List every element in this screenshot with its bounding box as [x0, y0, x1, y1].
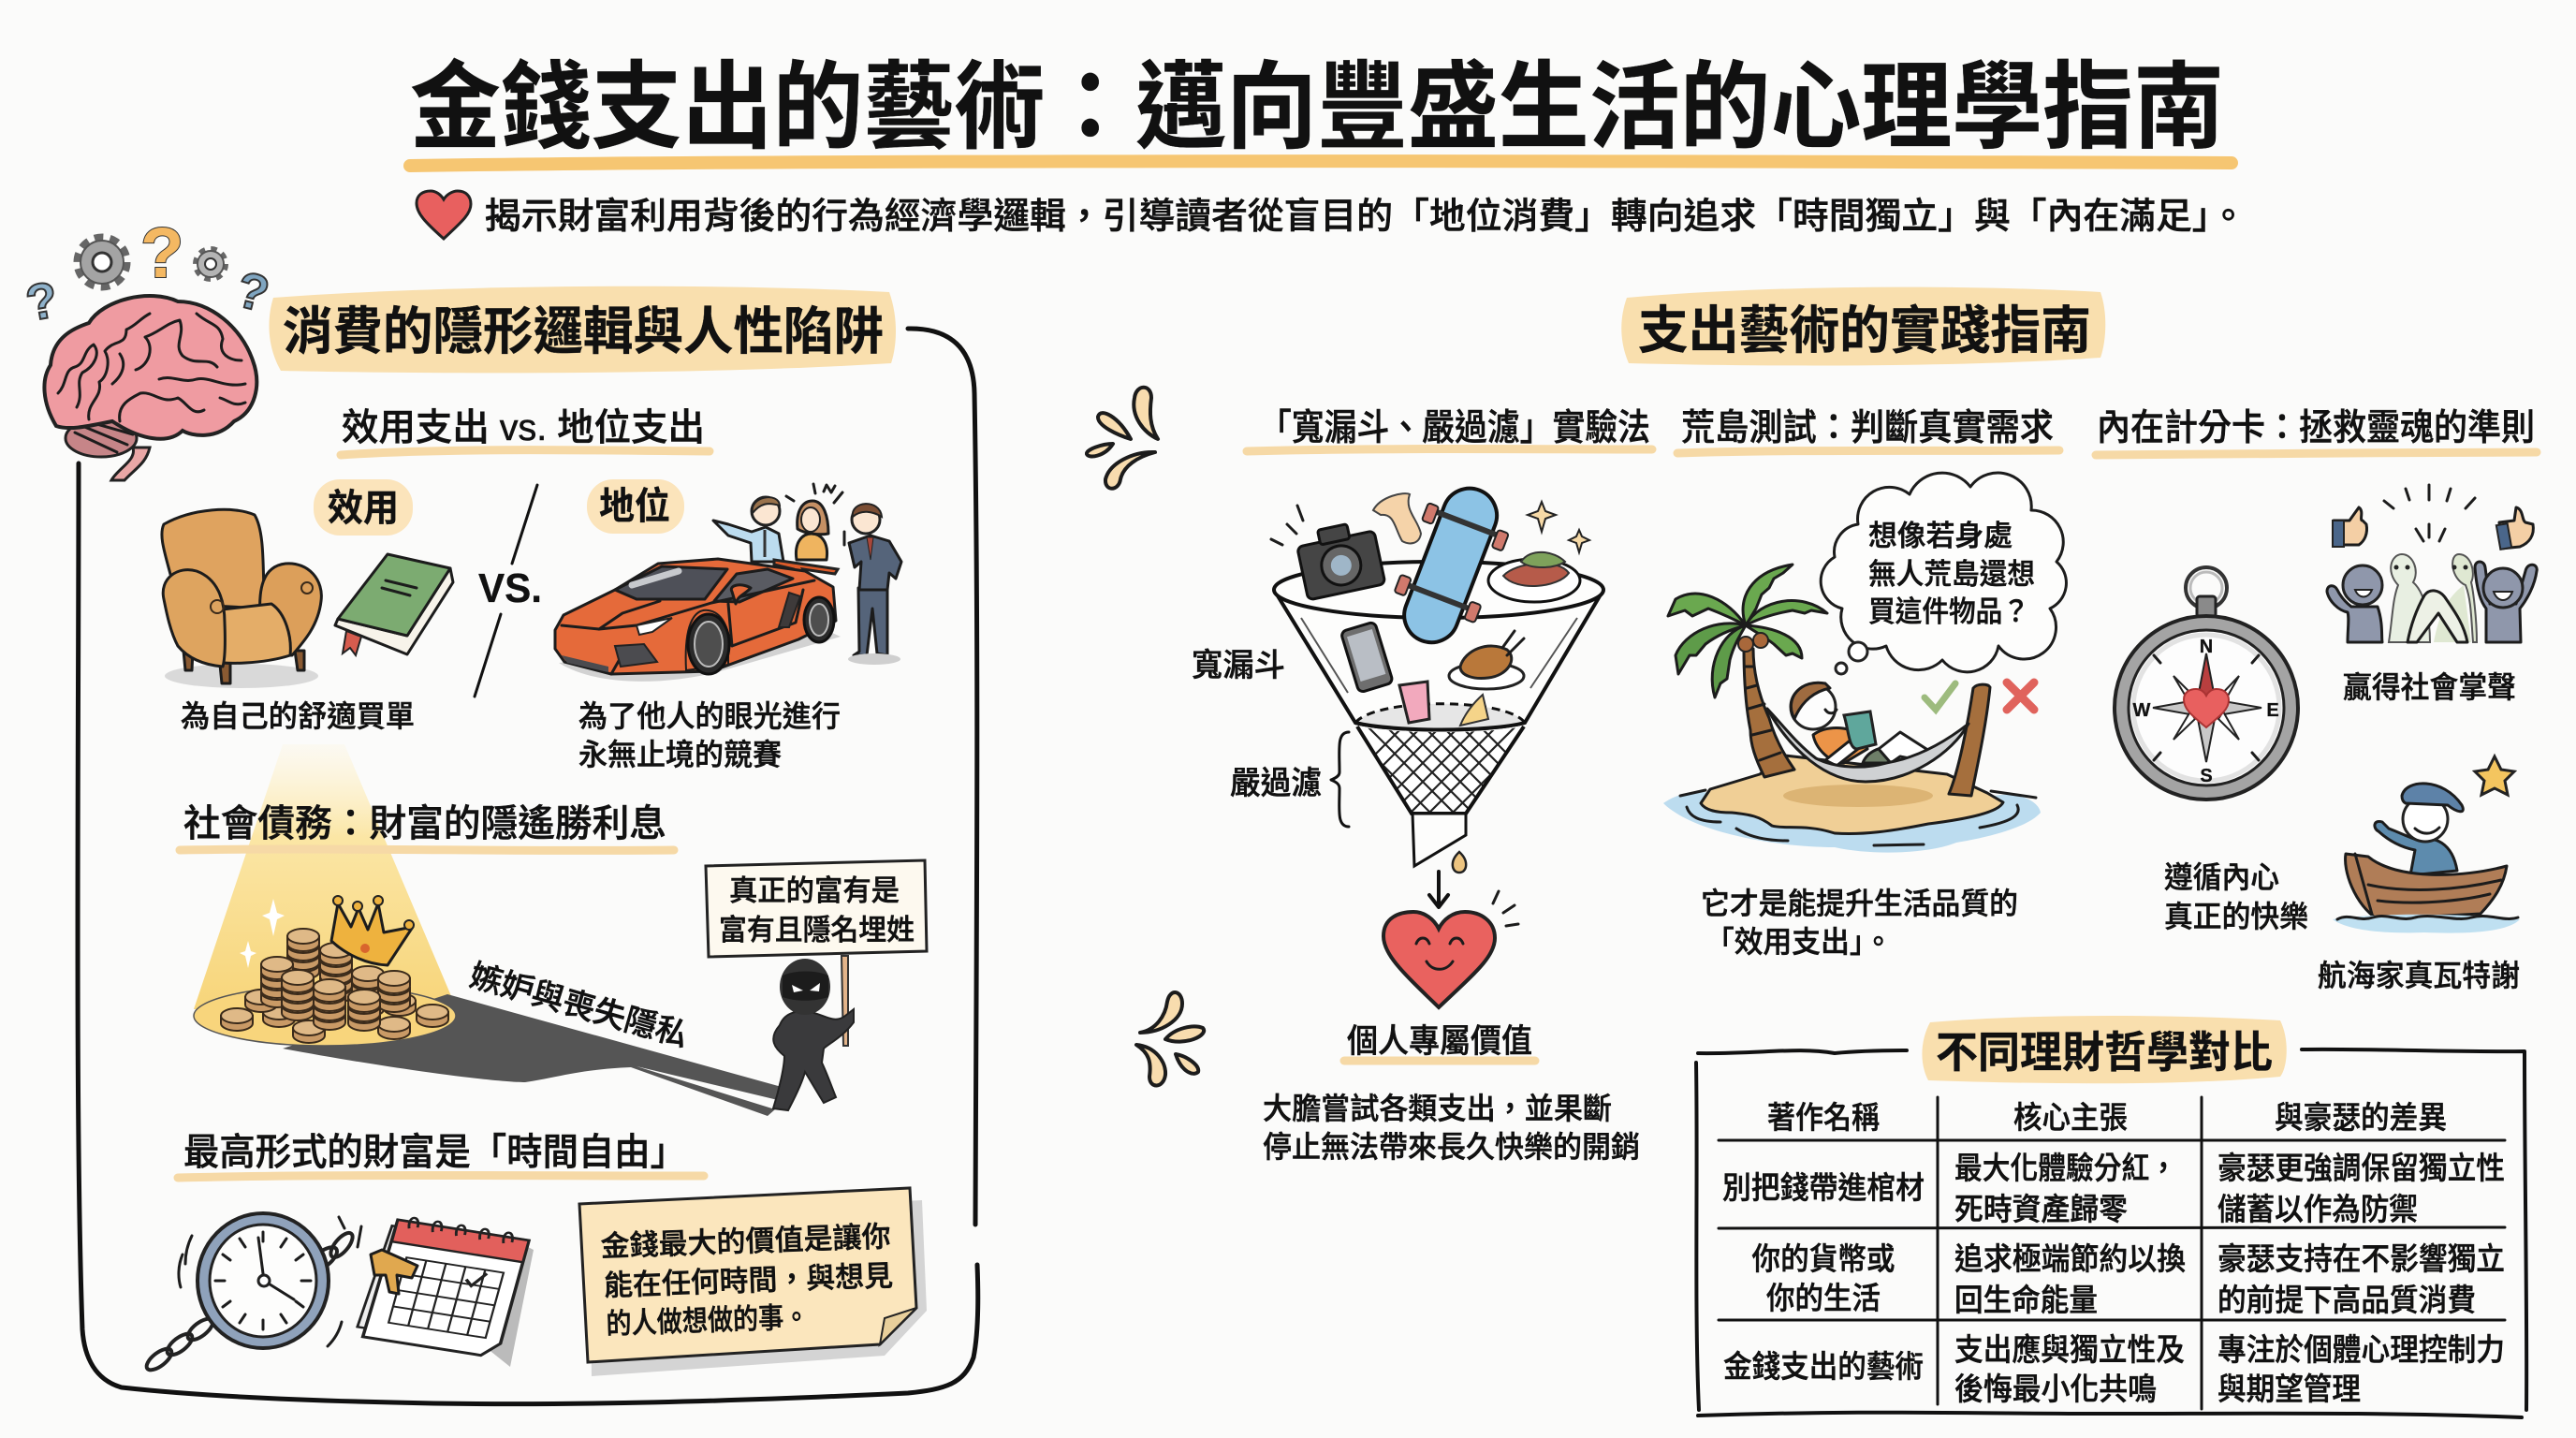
row: your money or your life: 你的生活	[1766, 1281, 1881, 1315]
compass caption	[2164, 860, 2308, 933]
icon: sports car	[555, 559, 841, 682]
compass caption: 真正的快樂	[2164, 900, 2308, 933]
sign board: 富有且隱名埋姓	[719, 914, 915, 946]
item: blob	[1373, 493, 1421, 543]
icon: question marks: ?	[140, 213, 183, 293]
row: die with zero: 豪瑟更強調保留獨立性	[2217, 1151, 2505, 1185]
row: the art of spending money: 後悔最小化共鳴	[1954, 1372, 2157, 1406]
badge: utility: 效用	[328, 488, 399, 529]
arrow	[1429, 872, 1448, 907]
ghost figures	[2389, 554, 2477, 642]
subheading: funnel experiment: 「寬漏斗、嚴過濾」實驗法	[1259, 408, 1650, 448]
subheading: desert island test: 荒島測試：判斷真實需求	[1681, 408, 2054, 448]
icon: gear large	[79, 239, 125, 286]
icon: calendar and key	[355, 1214, 534, 1367]
clapping hands	[2408, 591, 2467, 642]
table grid	[1719, 1097, 2505, 1409]
island caption: 「效用支出」。	[1705, 925, 1893, 959]
row: your money or your life: 豪瑟支持在不影響獨立	[2217, 1241, 2505, 1276]
panel: hidden logic of spending	[22, 213, 978, 1404]
header row	[1767, 1100, 2447, 1135]
item: drink	[1399, 682, 1429, 723]
mesh filter	[1355, 725, 1526, 815]
coconuts	[1738, 633, 1768, 652]
icon: sailor in boat	[2333, 756, 2520, 933]
island sand	[1701, 756, 2003, 834]
spotlit pile of coins and crown	[194, 896, 456, 1046]
sailor caption: 航海家真瓦特謝	[2318, 959, 2520, 992]
badge: utility	[314, 479, 413, 536]
sailor	[2375, 784, 2463, 875]
palm fronds	[1668, 565, 1827, 697]
star	[2475, 756, 2514, 795]
item: camera	[1295, 519, 1385, 600]
header row: 著作名稱	[1767, 1100, 1880, 1135]
item: steak plate	[1488, 552, 1580, 602]
caption: utility: 為自己的舒適買單	[181, 699, 415, 733]
funnel items	[1271, 475, 1589, 726]
callout: sticky note: 的人做想做的事。	[606, 1300, 810, 1341]
badge: status: 地位	[599, 486, 670, 527]
row: die with zero: 別把錢帶進棺材	[1722, 1170, 1925, 1205]
funnel body	[1274, 562, 1603, 730]
figure: pointing man	[713, 497, 783, 562]
row: the art of spending money: 金錢支出的藝術	[1723, 1349, 1924, 1384]
thought cloud: 無人荒島還想	[1868, 558, 2035, 591]
table outline	[1696, 1049, 2526, 1417]
row: the art of spending money: 專注於個體心理控制力	[2217, 1332, 2505, 1367]
label: wide funnel: 寬漏斗	[1192, 648, 1285, 683]
panel outline	[78, 329, 978, 1404]
header row: 核心主張	[2013, 1100, 2128, 1135]
row: die with zero: 死時資產歸零	[1954, 1192, 2128, 1226]
thought cloud: 買這件物品？	[1868, 595, 2029, 628]
label: envy and loss of privacy: 嫉妒與喪失隱私	[466, 958, 692, 1054]
wave strokes	[1680, 790, 2036, 845]
label: personal value: 個人專屬價值	[1347, 1023, 1532, 1060]
reading man	[1791, 682, 1926, 766]
funnel description: 大膽嘗試各類支出，並果斷	[1263, 1092, 1612, 1125]
row: your money or your life: 你的貨幣或	[1752, 1241, 1895, 1276]
label: strict filter: 嚴過濾	[1230, 766, 1322, 801]
icon: masked figure with sign	[706, 860, 927, 1110]
droplet	[1453, 852, 1466, 873]
figure: woman	[796, 501, 828, 560]
icon: admiring people	[713, 484, 901, 665]
icon: subtitle heart	[417, 191, 471, 239]
icon: smiling heart	[1383, 891, 1518, 1007]
applause caption: 贏得社會掌聲	[2343, 670, 2516, 704]
row: your money or your life: 追求極端節約以換	[1954, 1241, 2186, 1276]
row: die with zero: 儲蓄以作為防禦	[2217, 1192, 2418, 1226]
icon: moral compass	[2115, 567, 2298, 800]
badge: status	[587, 479, 684, 534]
row: your money or your life	[1752, 1241, 2505, 1317]
chains	[143, 1229, 357, 1373]
water	[1663, 792, 2041, 853]
item: cheese wedge	[1460, 695, 1488, 726]
callout: sticky note	[579, 1188, 927, 1376]
row: your money or your life: 的前提下高品質消費	[2217, 1283, 2476, 1317]
icon: moral compass: W	[2133, 700, 2151, 721]
subheading: inner scorecard: 內在計分卡：拯救靈魂的準則	[2097, 408, 2535, 448]
caption: status	[578, 699, 841, 771]
heading: hidden logic: 消費的隱形邏輯與人性陷阱	[283, 302, 884, 360]
table title	[1922, 1016, 2287, 1083]
subheading: time freedom: 最高形式的財富是「時間自由」	[183, 1132, 686, 1173]
row: your money or your life: 回生命能量	[1954, 1283, 2098, 1317]
heading: practice guide: 支出藝術的實踐指南	[1638, 301, 2091, 360]
title: 金錢支出的藝術：邁向豐盛生活的心理學指南	[410, 54, 2224, 161]
row: the art of spending money: 支出應與獨立性及	[1954, 1332, 2185, 1367]
icon: brain with gears and question marks	[22, 213, 274, 480]
icon: moral compass: N	[2200, 637, 2213, 657]
calendar	[355, 1214, 534, 1367]
icon: check mark	[1925, 683, 1955, 710]
item: sparkles	[1528, 502, 1589, 552]
item: phone	[1340, 622, 1393, 693]
decorative splash lower	[1136, 992, 1204, 1086]
item: skateboard	[1382, 475, 1519, 656]
coin stacks	[221, 929, 448, 1043]
shadow of envy	[283, 994, 782, 1116]
icon: green book	[335, 554, 453, 655]
compass caption: 遵循內心	[2164, 860, 2279, 894]
sign board	[706, 860, 927, 957]
spout	[1412, 814, 1466, 866]
row: die with zero	[1722, 1151, 2505, 1226]
icon: moral compass: E	[2266, 700, 2279, 721]
key	[371, 1250, 417, 1294]
icon: question marks: ?	[231, 261, 274, 323]
decorative splash top	[1087, 388, 1158, 489]
funnel description: 停止無法帶來長久快樂的開銷	[1263, 1130, 1640, 1164]
icon: gear small	[197, 250, 225, 278]
label: strict filter	[1230, 732, 1349, 827]
icon: crown	[331, 896, 414, 965]
callout: sticky note: 能在任何時間，與想見	[603, 1259, 894, 1302]
palm trunk	[1744, 649, 1794, 777]
icon: question marks: ?	[22, 271, 62, 332]
divider: vs: VS.	[478, 565, 542, 611]
row: the art of spending money	[1723, 1332, 2505, 1406]
island caption	[1701, 887, 2018, 959]
funnel diagram	[1192, 475, 1640, 1164]
icon: armchair	[162, 509, 321, 688]
boat	[2346, 854, 2507, 919]
icon: clock with broken chain	[143, 1213, 361, 1373]
thought cloud	[1821, 473, 2066, 672]
caption: status: 永無止境的競賽	[578, 738, 782, 771]
icon: applauding crowd	[2327, 485, 2537, 642]
sparkles	[240, 899, 285, 968]
caption: status: 為了他人的眼光進行	[578, 699, 841, 733]
subtitle text: 揭示財富利用背後的行為經濟學邏輯，引導讀者從盲目的「地位消費」轉向追求「時間獨立」與「內在滿足」。	[485, 197, 2247, 237]
header row: 與豪瑟的差異	[2275, 1100, 2447, 1135]
divider: vs	[475, 485, 542, 697]
icon: cross mark	[2007, 682, 2034, 710]
subtitle	[417, 191, 2247, 239]
subheading: utility vs status: 效用支出 vs. 地位支出	[342, 407, 705, 448]
thought dots	[1836, 642, 1867, 674]
sign board: 真正的富有是	[729, 874, 900, 907]
hammock	[1767, 709, 1969, 782]
sign pole	[842, 956, 848, 1046]
figure body	[773, 959, 854, 1110]
praise rays	[2384, 485, 2475, 541]
callout: sticky note: 金錢最大的價值是讓你	[600, 1220, 891, 1263]
water	[2333, 915, 2520, 933]
icon: moral compass: S	[2200, 766, 2213, 786]
row: the art of spending money: 與期望管理	[2217, 1372, 2361, 1406]
thumbs up	[2333, 507, 2533, 550]
desert island illustration	[1663, 473, 2066, 853]
row: die with zero: 最大化體驗分紅，	[1954, 1151, 2177, 1185]
table title: 不同理財哲學對比	[1936, 1028, 2273, 1077]
thought cloud: 想像若身處	[1868, 520, 2012, 552]
item: roast chicken	[1449, 631, 1524, 689]
comparison table panel	[1696, 1016, 2526, 1417]
right post	[1949, 684, 1990, 796]
subheading: social debt: 社會債務：財富的隱遙勝利息	[183, 803, 666, 844]
icon: question marks	[22, 213, 274, 332]
heading: hidden logic	[269, 286, 896, 373]
funnel description	[1263, 1092, 1640, 1164]
figure: man in suit	[844, 504, 901, 665]
cheering figures	[2327, 562, 2537, 642]
spotlight beam	[194, 744, 457, 1009]
island caption: 它才是能提升生活品質的	[1701, 887, 2018, 920]
